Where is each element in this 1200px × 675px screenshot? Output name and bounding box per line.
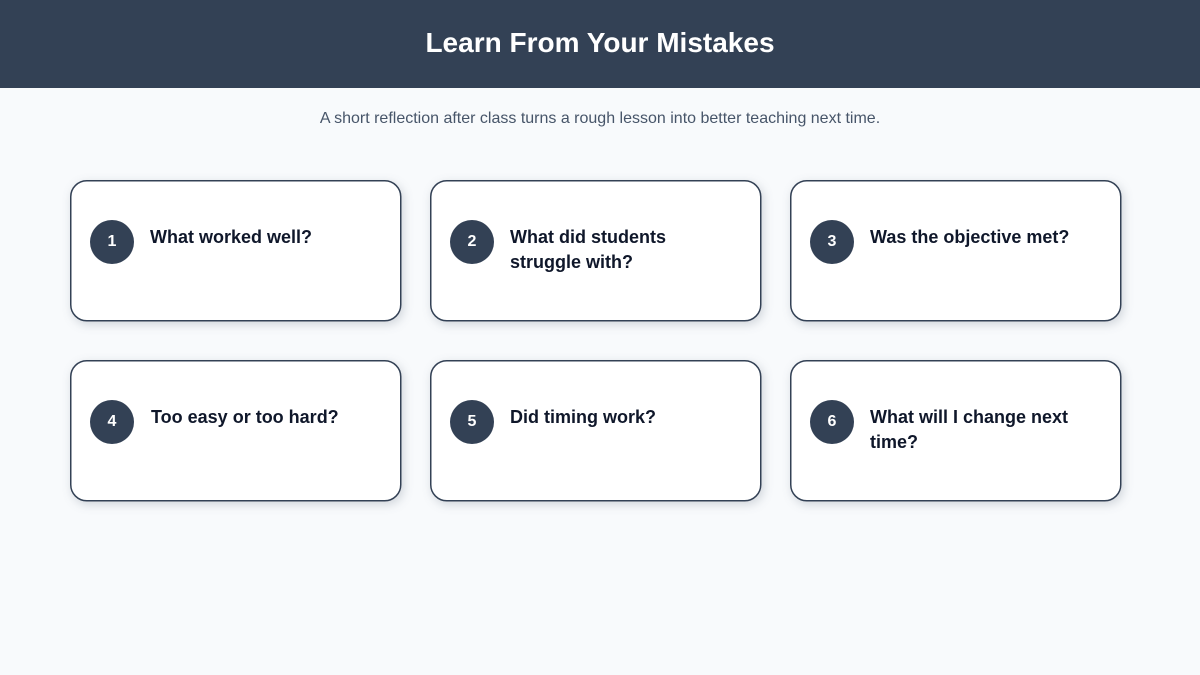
number badge 6 <box>810 400 854 444</box>
number badge 2: 2 <box>468 233 476 250</box>
number badge 4 <box>90 400 134 444</box>
panel: card 5 <box>428 359 768 508</box>
number badge 3: 3 <box>828 233 836 250</box>
question 2: struggle with? <box>510 252 633 272</box>
number badge 1: 1 <box>108 233 116 250</box>
number badge 4: 4 <box>108 413 116 430</box>
title: Learn From Your Mistakes <box>425 27 775 58</box>
number badge 5 <box>450 400 494 444</box>
number badge 6: 6 <box>828 413 836 430</box>
question 1: What worked well? <box>150 227 312 247</box>
header band <box>0 0 1200 88</box>
panel: card 2 <box>428 179 768 328</box>
question 2: What did students <box>510 227 666 247</box>
question 6: time? <box>870 432 918 452</box>
question 2 <box>510 227 666 272</box>
number badge 2 <box>450 220 494 264</box>
number badge 1 <box>90 220 134 264</box>
number badge 5: 5 <box>468 413 476 430</box>
question 6: What will I change next <box>870 407 1068 427</box>
panel: card 1 <box>68 179 408 328</box>
question 6 <box>870 407 1068 452</box>
question 5: Did timing work? <box>510 407 656 427</box>
question 4: Too easy or too hard? <box>151 407 339 427</box>
panel: card 3 <box>788 179 1128 328</box>
question 3: Was the objective met? <box>870 227 1069 247</box>
number badge 3 <box>810 220 854 264</box>
subtitle: A short reflection after class turns a rough lesson into better teaching next time. <box>320 110 880 126</box>
panel: card 6 <box>788 359 1128 508</box>
panel: card 4 <box>68 359 408 508</box>
